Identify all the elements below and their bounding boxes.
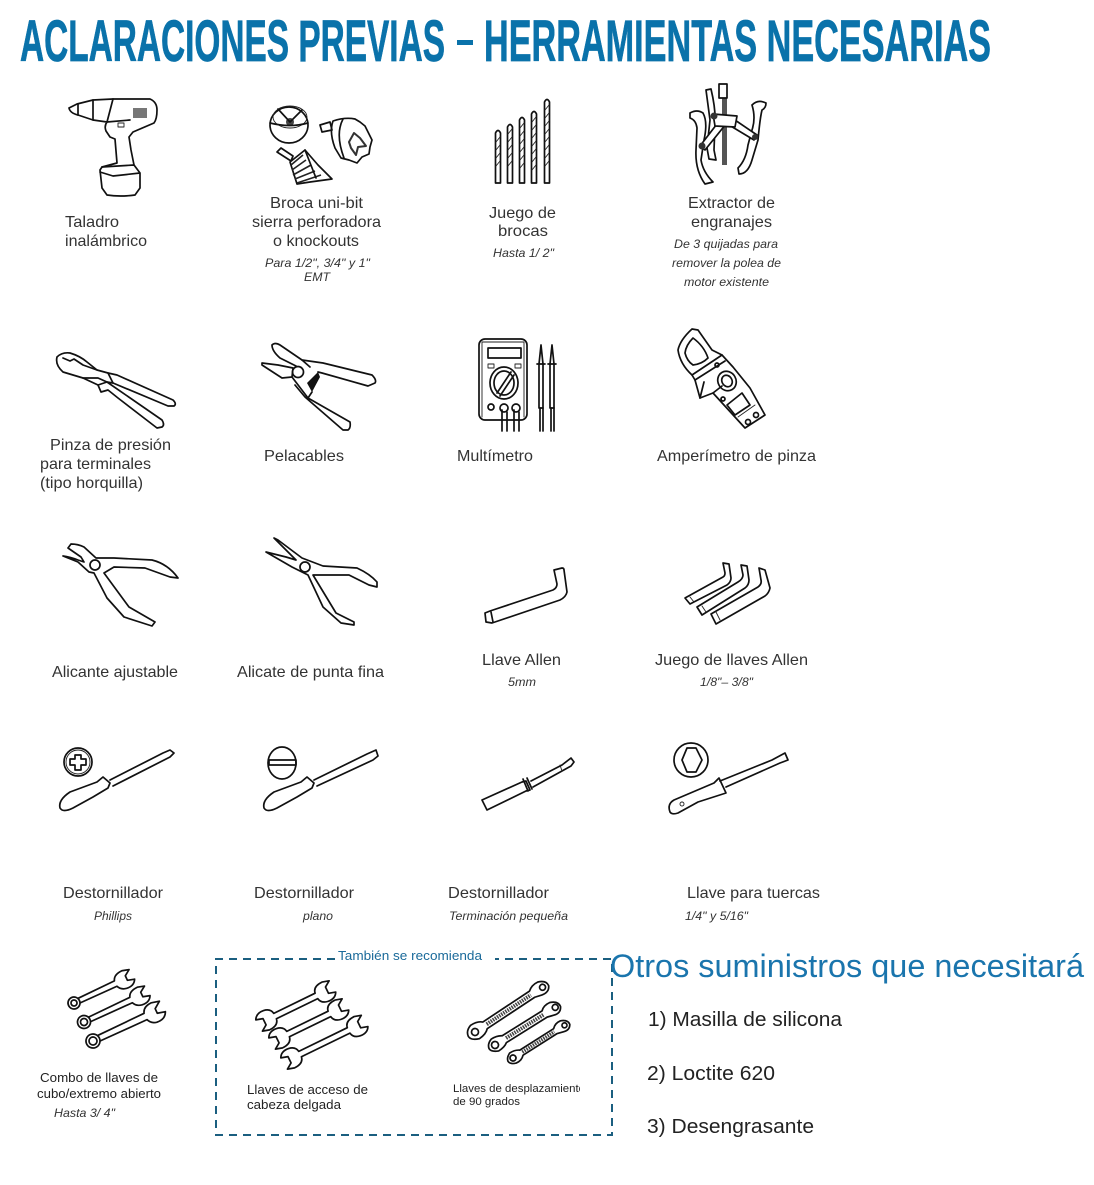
icon: nut driver xyxy=(669,743,788,814)
label: Juego de llaves Allen xyxy=(655,652,808,669)
label xyxy=(489,205,556,260)
tool: combination wrenches xyxy=(37,967,168,1120)
label: Destornillador xyxy=(448,885,550,902)
label: Alicate de punta fina xyxy=(237,664,384,681)
label: 1/4" y 5/16" xyxy=(685,909,749,923)
label: engranajes xyxy=(691,214,772,231)
label xyxy=(655,652,808,689)
icon: stripper xyxy=(262,344,376,430)
tool: nut driver xyxy=(669,743,820,923)
title: ACLARACIONES PREVIAS xyxy=(20,9,445,74)
label: Taladro xyxy=(65,214,119,231)
label: Pelacables xyxy=(264,448,344,465)
label: EMT xyxy=(304,270,332,284)
label: Extractor de xyxy=(688,195,775,212)
label: Pinza de presión xyxy=(50,437,171,454)
icon: 3-jaw puller xyxy=(690,84,766,184)
label: Terminación pequeña xyxy=(449,909,568,923)
label: Destornillador xyxy=(254,885,355,902)
label xyxy=(252,195,381,284)
label: plano xyxy=(302,909,333,923)
tool: adjustable pliers xyxy=(52,544,178,681)
tool: thin head wrenches xyxy=(247,978,370,1112)
label: para terminales xyxy=(40,456,151,473)
tool: small tip screwdriver xyxy=(448,758,574,923)
label: de 90 grados xyxy=(453,1096,521,1108)
label: remover la polea de xyxy=(672,256,781,270)
icon: thin wrenches xyxy=(254,978,370,1072)
label: Hasta 1/ 2" xyxy=(493,246,555,260)
icon: hole saw set xyxy=(270,106,372,184)
label: cabeza delgada xyxy=(247,1097,342,1112)
icon: allen keys xyxy=(685,563,770,624)
icon: phillips screwdriver xyxy=(60,748,174,810)
tool: needle nose pliers xyxy=(237,538,384,681)
label: De 3 quijadas para xyxy=(674,237,778,251)
supplies heading: Otros suministros que necesitará xyxy=(610,948,1084,984)
label: inalámbrico xyxy=(65,233,147,250)
label: Alicante ajustable xyxy=(52,664,178,681)
panel: other supplies xyxy=(610,948,1084,1138)
label: Broca uni-bit xyxy=(270,195,364,212)
label: Llaves de acceso de xyxy=(247,1082,368,1097)
supplies list xyxy=(647,1009,843,1138)
label: o knockouts xyxy=(273,233,359,250)
icon: crimper xyxy=(57,353,175,428)
label xyxy=(65,214,147,250)
icon: small screwdriver xyxy=(482,758,574,810)
label: Llave para tuercas xyxy=(687,885,820,902)
tool: ratcheting wrenches xyxy=(453,977,585,1108)
icon: drill bits xyxy=(496,100,550,183)
label xyxy=(63,885,164,923)
tool: wire stripper xyxy=(262,344,376,465)
label: Llaves de desplazamiento xyxy=(453,1083,585,1095)
label xyxy=(40,437,171,492)
label: sierra perforadora xyxy=(252,214,381,231)
label: motor existente xyxy=(684,275,769,289)
icon: offset wrenches xyxy=(464,977,572,1066)
supplies list: 1) Masilla de silicona xyxy=(648,1009,843,1031)
tool: hole saw and uni-bit xyxy=(252,106,381,284)
tool: allen key xyxy=(482,568,567,689)
label xyxy=(254,885,355,923)
icon: pliers xyxy=(63,544,178,626)
tool: drill bit set xyxy=(489,100,556,260)
supplies list: 2) Loctite 620 xyxy=(647,1063,775,1085)
label xyxy=(672,195,781,289)
panel heading: También se recomienda xyxy=(338,948,483,963)
label: Amperímetro de pinza xyxy=(657,448,816,465)
label: Juego de xyxy=(489,205,556,222)
tool: multimeter xyxy=(457,339,556,465)
label: Destornillador xyxy=(63,885,164,902)
tool: allen key set xyxy=(655,563,808,689)
label: Llave Allen xyxy=(482,652,561,669)
panel: also recommended xyxy=(216,948,612,1135)
label: Multímetro xyxy=(457,448,533,465)
label xyxy=(37,1070,161,1120)
label: (tipo horquilla) xyxy=(40,475,143,492)
icon: clamp ammeter xyxy=(678,329,765,428)
tool: phillips screwdriver xyxy=(60,748,174,923)
icon: combination wrenches xyxy=(65,967,168,1053)
label: Hasta 3/ 4" xyxy=(54,1106,116,1120)
label: cubo/extremo abierto xyxy=(37,1086,161,1101)
label: brocas xyxy=(498,223,548,240)
label xyxy=(453,1083,585,1108)
label xyxy=(448,885,568,923)
icon: allen key xyxy=(485,568,567,623)
tool: clamp meter xyxy=(657,329,816,465)
label: Phillips xyxy=(94,909,132,923)
label xyxy=(482,652,561,689)
label: 1/8"– 3/8" xyxy=(700,675,754,689)
tool: cordless drill xyxy=(65,99,157,250)
label: Combo de llaves de xyxy=(40,1070,158,1085)
tool: crimping pliers xyxy=(40,353,175,492)
icon: flat screwdriver xyxy=(264,747,378,810)
label xyxy=(685,885,820,923)
icon: needle nose pliers xyxy=(266,538,377,625)
icon: drill xyxy=(69,99,157,196)
supplies list: 3) Desengrasante xyxy=(647,1116,814,1138)
icon: multimeter xyxy=(479,339,556,431)
label: Para 1/2", 3/4" y 1" xyxy=(265,256,371,270)
label: 5mm xyxy=(508,675,536,689)
dashed frame xyxy=(216,959,612,1135)
label xyxy=(247,1082,368,1112)
tool: flat screwdriver xyxy=(254,747,378,923)
tool: gear puller xyxy=(672,84,781,289)
